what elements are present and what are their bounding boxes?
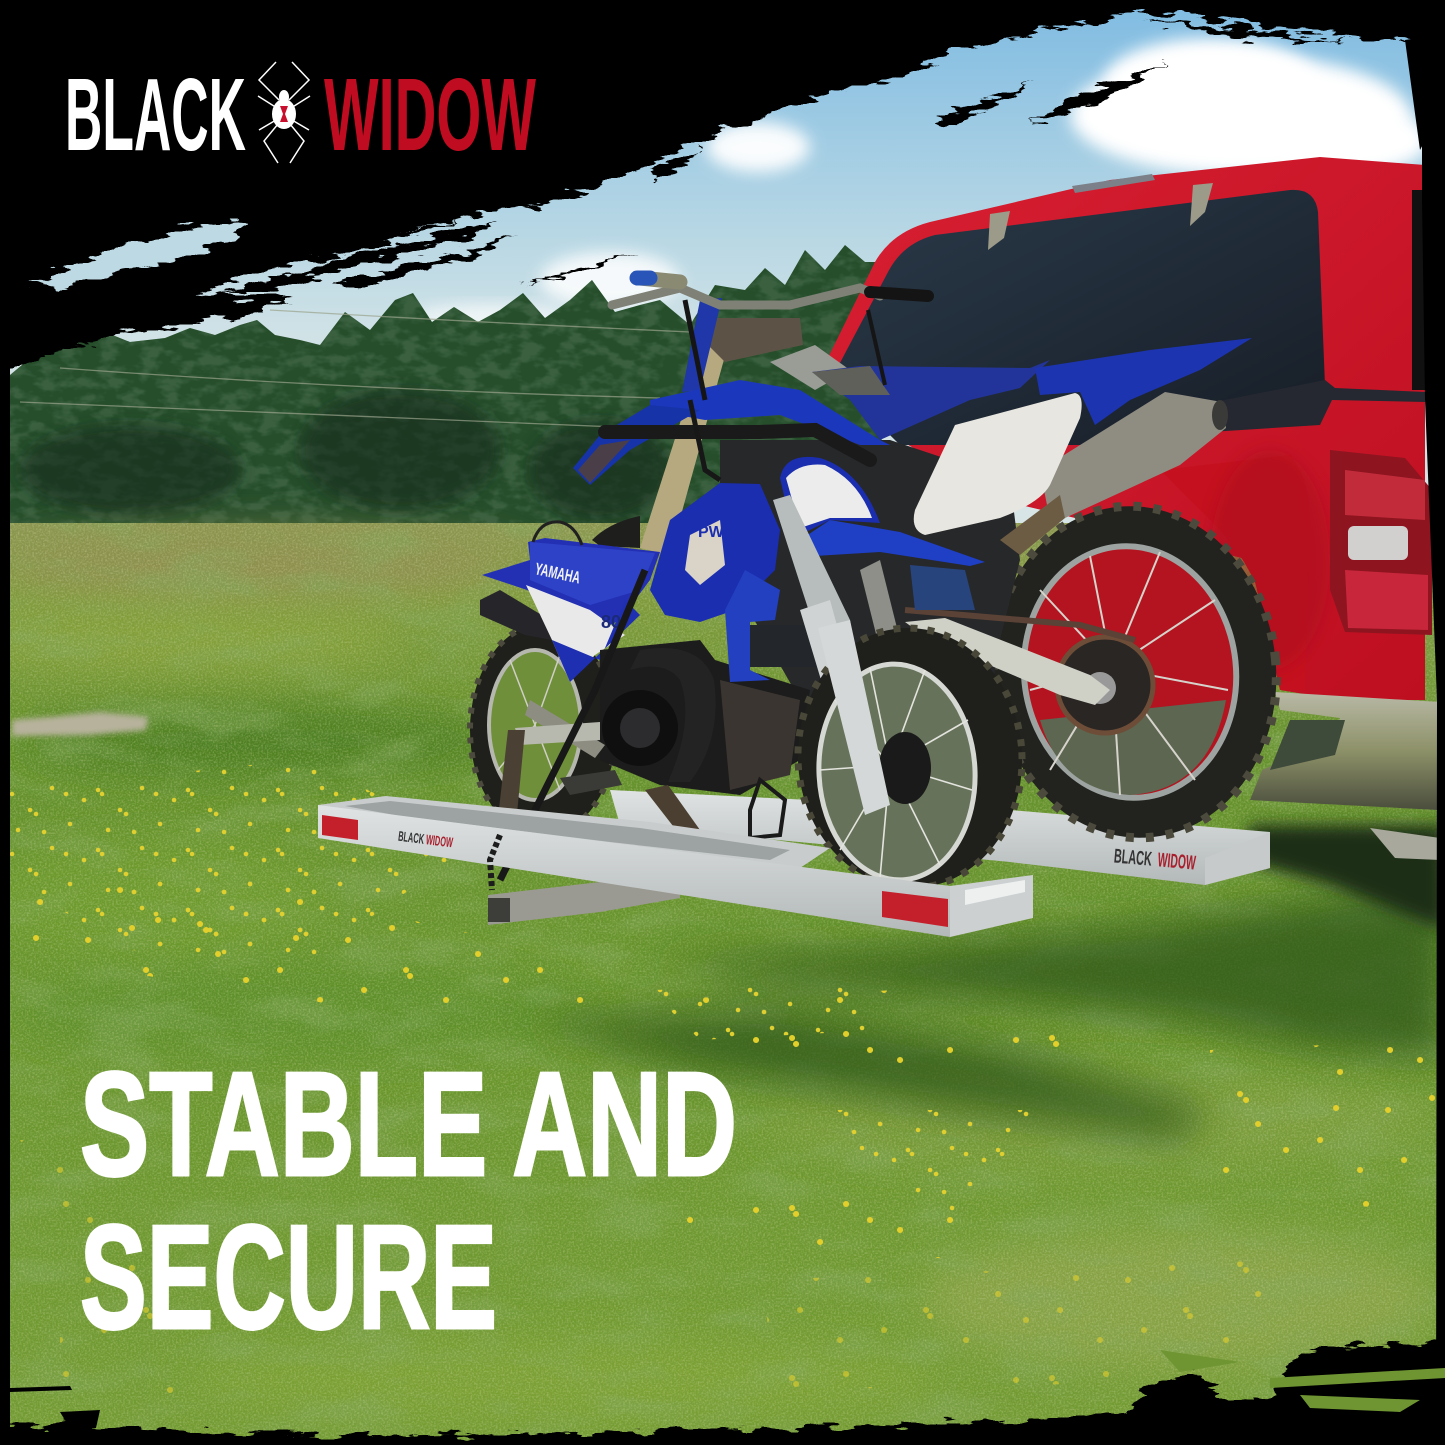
rear tie-down	[645, 785, 700, 835]
front mudguard	[800, 520, 985, 566]
exhaust	[1040, 392, 1226, 518]
rail face	[318, 805, 950, 937]
seat loop	[533, 522, 582, 545]
front number plate	[573, 405, 700, 485]
lower rim background	[1040, 700, 1226, 795]
rear tire	[977, 492, 1293, 852]
silencer	[480, 590, 552, 640]
small Yamaha dirt bike	[470, 400, 1029, 894]
rear window	[832, 190, 1325, 445]
Yamaha label: YAMAHA	[533, 559, 582, 587]
spider icon	[258, 62, 310, 163]
grass field	[0, 523, 1445, 1445]
title line 2: SECURE	[80, 1195, 497, 1360]
right border	[1422, 0, 1445, 1445]
large dirt bike	[573, 278, 1293, 852]
tree line	[10, 240, 890, 535]
front rack rail	[318, 796, 1033, 937]
rear tie strap	[685, 300, 705, 400]
rear shock	[910, 565, 975, 610]
yellow flowers	[10, 760, 1440, 1400]
small Yamaha dirt bike: 80	[601, 612, 621, 632]
footpeg	[560, 770, 622, 795]
rail logo: WIDOW	[1157, 849, 1197, 875]
top brush stroke	[0, 0, 1445, 385]
small rear spokes	[498, 655, 560, 790]
title	[80, 1042, 737, 1360]
rear handlebar grips	[637, 278, 928, 296]
radiator shrouds	[650, 380, 890, 445]
rail logo small: WIDOW	[425, 831, 454, 850]
bottom-right grass streaks	[1160, 1350, 1445, 1412]
front fork and headset	[640, 345, 728, 555]
logo word BLACK: BLACK	[65, 57, 246, 172]
rail logo small: BLACK	[397, 828, 425, 847]
lower fork leg	[818, 620, 890, 815]
seat and tail	[482, 538, 660, 635]
bottom-left specks	[10, 1386, 100, 1428]
radiator	[750, 625, 820, 667]
fuel tank cap	[770, 345, 850, 390]
swingarm	[905, 618, 1110, 705]
tree shading	[20, 390, 670, 520]
logo word WIDOW: WIDOW	[324, 57, 536, 172]
chrome bumper	[1250, 692, 1440, 810]
small front rim	[813, 660, 981, 884]
tail light	[1330, 450, 1432, 635]
chain	[905, 610, 1135, 640]
tree mottling	[10, 240, 890, 535]
side panel	[526, 585, 625, 682]
roof badge	[1072, 174, 1155, 193]
fork	[773, 495, 880, 810]
small handlebar	[605, 430, 870, 460]
side number plate	[914, 393, 1082, 535]
rail end	[950, 875, 1033, 937]
grass mottling	[0, 523, 1445, 1445]
chain	[490, 835, 500, 890]
rail top inner	[318, 796, 830, 868]
shell bottom seal	[1200, 380, 1425, 432]
seat	[812, 360, 1050, 440]
sprocket	[1057, 637, 1153, 733]
clouds	[410, 38, 1430, 332]
right dark edge	[1412, 190, 1428, 390]
rear handlebar	[612, 288, 880, 305]
brush streaks	[215, 20, 1350, 292]
tie-down strap	[500, 570, 645, 880]
left border	[0, 300, 10, 1445]
hitch tube	[488, 865, 680, 925]
shadow on grass	[520, 880, 1445, 1140]
grass patches	[0, 537, 1440, 1420]
bottom border	[0, 1340, 1445, 1445]
front shroud	[780, 457, 880, 535]
small front tire	[791, 622, 1029, 894]
red reflectors	[322, 815, 358, 840]
rail inner channel	[345, 801, 790, 860]
spokes	[1030, 552, 1228, 795]
frame backdrop	[720, 440, 1020, 700]
rim opening	[1011, 536, 1249, 808]
tank	[650, 483, 780, 622]
engine cover	[630, 648, 716, 782]
sky gap in brush	[30, 222, 240, 290]
window clips	[988, 183, 1213, 250]
rear fender	[1035, 338, 1252, 425]
small Yamaha dirt bike: PW	[698, 524, 725, 541]
rail logo: BLACK	[1113, 845, 1153, 871]
brand logo	[65, 57, 536, 172]
rear rack rail	[610, 790, 1270, 885]
engine block	[600, 640, 810, 795]
grass texture	[0, 523, 1445, 1445]
front spokes	[820, 668, 972, 878]
small rear tire	[470, 624, 616, 836]
sky	[0, 0, 1445, 560]
front wheel behind	[592, 516, 640, 548]
camper shell and body	[822, 157, 1425, 700]
body panel highlight	[1160, 455, 1310, 690]
truck shadow area	[1240, 825, 1445, 930]
gravel patch	[12, 712, 148, 736]
title line 1: STABLE AND	[80, 1042, 737, 1207]
red pickup truck	[822, 157, 1445, 930]
power lines	[20, 310, 690, 428]
front hub	[879, 732, 931, 804]
